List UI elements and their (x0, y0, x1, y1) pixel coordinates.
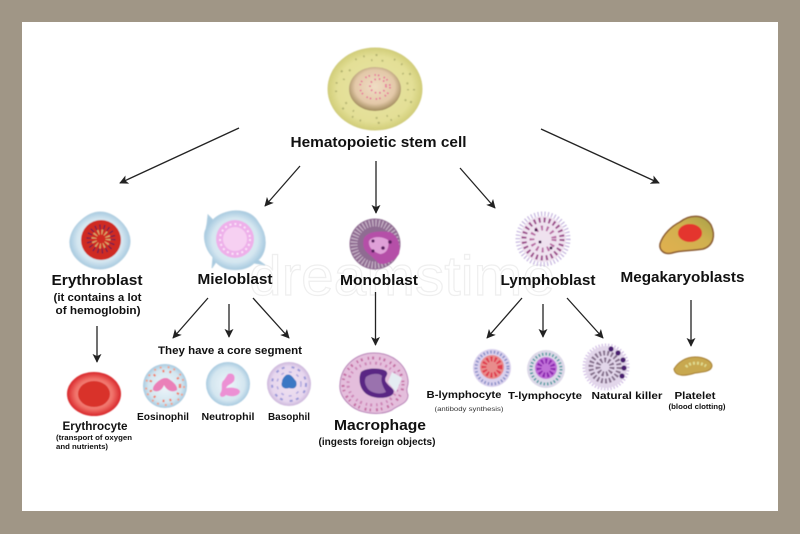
icon: erythroblast (70, 212, 130, 269)
icon: macrophage (340, 353, 408, 413)
label: erythroblast: (it contains a lot (54, 292, 142, 304)
label: erythrocyte: and nutrients) (56, 442, 109, 451)
icon: megakaryoblast (660, 216, 713, 253)
watermark: dreamstime (249, 244, 555, 307)
label: megakaryoblasts: Megakaryoblasts (620, 270, 744, 286)
label: macrophage: Macrophage (334, 418, 426, 434)
icon: erythrocyte (67, 372, 121, 416)
label: erythrocyte: Erythrocyte (62, 421, 128, 433)
arrow: monoblast to macrophage (374, 292, 376, 345)
icon: neutrophil (206, 362, 250, 406)
icon: eosinophil (143, 364, 187, 408)
label: erythroblast: of hemoglobin) (56, 305, 141, 317)
icon: monoblast (350, 218, 400, 270)
title: hematopoietic stem cell: Hematopoietic stem cell (290, 135, 466, 151)
label: natural killer: Natural killer (592, 390, 662, 402)
icon: mieloblast (204, 211, 265, 270)
icon: lymphoblast (518, 214, 568, 264)
arrows from lymphoblast (487, 298, 603, 338)
arrow: erythroblast to erythrocyte (96, 326, 98, 362)
label: platelet: (blood clotting) (668, 402, 726, 411)
label: neutrophil: Neutrophil (202, 411, 255, 423)
icon: hematopoietic stem cell (328, 48, 422, 130)
label: erythroblast: Erythroblast (52, 273, 143, 289)
arrow: megakaryoblast to platelet (690, 300, 692, 346)
label: lymphoblast: Lymphoblast (500, 273, 596, 289)
label: erythrocyte: (transport of oxygen (56, 433, 132, 442)
arrows from stem cell (120, 128, 659, 213)
arrows from mieloblast (173, 298, 289, 338)
label: b-lymphocyte: B-lymphocyte (426, 389, 502, 401)
label: b-lymphocyte (426, 389, 504, 413)
icon: basophil (267, 362, 311, 406)
label: macrophage (318, 418, 436, 448)
label: b-lymphocyte: (antibody synthesis) (434, 406, 504, 413)
label: platelet (668, 390, 726, 411)
label: monoblast: Monoblast (340, 273, 418, 289)
label: platelet: Platelet (674, 390, 716, 402)
label: mieloblast: Mieloblast (198, 272, 273, 288)
label: t-lymphocyte: T-lymphocyte (508, 390, 582, 402)
label: eosinophil: Eosinophil (137, 411, 189, 423)
label: macrophage: (ingests foreign objects) (318, 436, 436, 448)
label: erythroblast (52, 273, 143, 317)
icon: b-lymphocyte (473, 349, 511, 387)
icon: natural killer (584, 345, 628, 389)
label: basophil: Basophil (268, 411, 310, 423)
label: erythrocyte (56, 421, 132, 451)
icon: t-lymphocyte (527, 350, 565, 388)
icon: platelet (674, 357, 712, 375)
text: they have a core segment: They have a core segment (158, 345, 302, 357)
